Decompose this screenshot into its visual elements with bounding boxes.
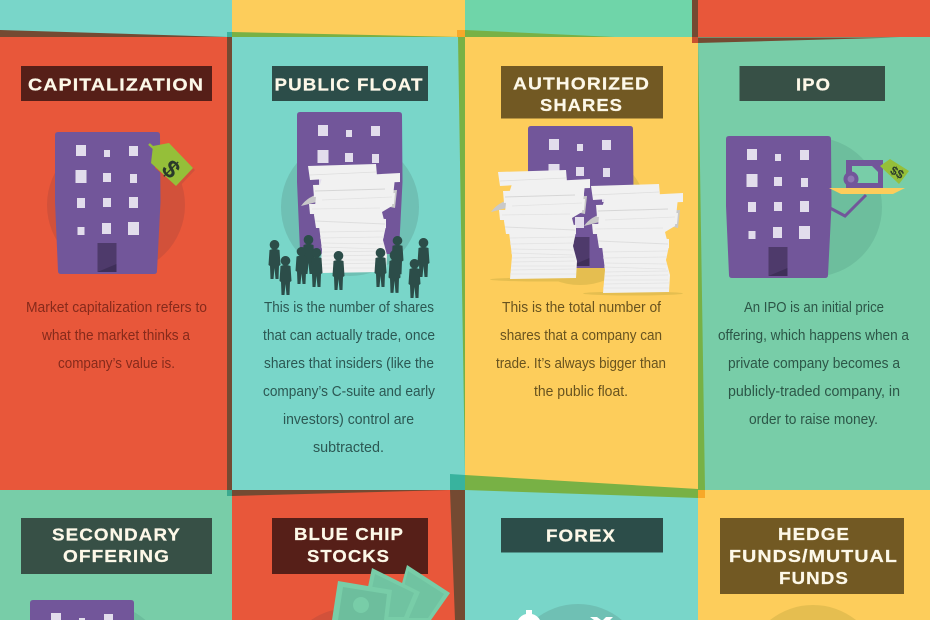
panel: authorized shares — [465, 37, 698, 490]
heading: blue chip stocks: BLUE CHIP — [294, 524, 404, 544]
heading: hedge funds / mutual funds: FUNDS/MUTUAL — [729, 546, 898, 566]
icon: building with price tag: $ — [156, 155, 186, 184]
icon: currency symbol tops cropped by the frame — [518, 604, 622, 620]
heading: hedge funds / mutual funds — [720, 518, 904, 594]
icon: circle backdrop — [770, 605, 856, 620]
description: public float: company’s C-suite and early — [263, 384, 436, 400]
heading: forex: FOREX — [546, 526, 616, 546]
icon: building with price tag — [47, 132, 195, 274]
description: public float: investors) control are — [283, 412, 414, 428]
panel: IPO — [698, 37, 930, 490]
description: capitalization: Market capitalization refers to — [26, 300, 207, 316]
description: public float: This is the number of shares — [264, 300, 434, 316]
icon: building behind paper stack with people — [268, 112, 430, 298]
panel: forex — [465, 490, 698, 620]
heading: public float — [272, 66, 428, 101]
panel: capitalization — [0, 37, 232, 490]
heading: authorized shares: SHARES — [540, 95, 623, 115]
heading: blue chip stocks: STOCKS — [307, 546, 390, 566]
icon: building serving certificate on a tray: $$ — [888, 163, 907, 182]
heading: secondary offering: OFFERING — [63, 546, 170, 566]
description: IPO: private company becomes a — [728, 356, 901, 372]
icon: building — [30, 600, 145, 620]
description: authorized shares: trade. It’s always bigger than — [496, 356, 666, 372]
description: authorized shares: shares that a company can — [500, 328, 662, 344]
description: capitalization: what the market thinks a — [41, 328, 191, 344]
heading: forex — [501, 518, 663, 552]
description: public float — [263, 300, 436, 456]
description: IPO: publicly-traded company, in — [728, 384, 900, 400]
description: public float: shares that insiders (like the — [264, 356, 434, 372]
icon: banknotes — [311, 565, 450, 620]
heading: secondary offering — [21, 518, 212, 574]
description: authorized shares: This is the total number of — [502, 300, 662, 316]
heading: authorized shares: AUTHORIZED — [513, 74, 650, 94]
description: IPO: order to raise money. — [749, 412, 878, 428]
heading: IPO — [740, 66, 885, 101]
heading: capitalization: CAPITALIZATION — [28, 74, 204, 94]
heading: capitalization — [21, 66, 212, 101]
heading: public float: PUBLIC FLOAT — [274, 74, 424, 94]
description: authorized shares — [496, 300, 666, 400]
description: public float: subtracted. — [313, 440, 384, 456]
panel: secondary offering — [0, 490, 232, 620]
heading: authorized shares — [501, 66, 663, 118]
description: authorized shares: the public float. — [534, 384, 628, 400]
top strip: previous row panels — [0, 0, 930, 37]
heading: blue chip stocks — [272, 518, 428, 574]
icon: building behind two paper stacks — [490, 126, 683, 296]
heading: hedge funds / mutual funds: HEDGE — [778, 524, 850, 544]
description: IPO: offering, which happens when a — [718, 328, 910, 344]
panel: hedge funds — [698, 490, 930, 620]
icon: building serving certificate on a tray — [726, 136, 909, 278]
description: capitalization: company’s value is. — [58, 356, 175, 372]
heading: hedge funds / mutual funds: FUNDS — [779, 568, 849, 588]
panel: blue chip stocks — [232, 490, 465, 620]
description: IPO — [718, 300, 910, 428]
description: public float: that can actually trade, once — [263, 328, 435, 344]
description: IPO: An IPO is an initial price — [744, 300, 884, 316]
heading: IPO: IPO — [796, 74, 831, 94]
description: capitalization — [26, 300, 207, 372]
heading: secondary offering: SECONDARY — [52, 524, 181, 544]
panel: public float — [232, 37, 465, 490]
